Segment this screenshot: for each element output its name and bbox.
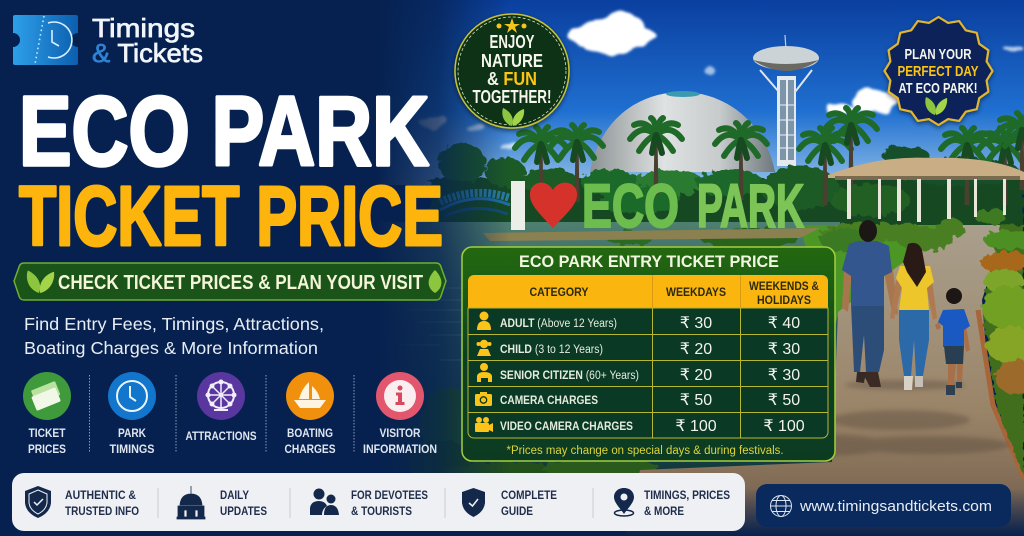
trust item: complete guide: GUIDE: [501, 506, 533, 518]
badge text: [898, 46, 978, 97]
row: child: CHILD (3 to 12 Years): [500, 344, 603, 356]
row: camera charges: CAMERA CHARGES: [500, 395, 598, 407]
trust item: timings prices and more: TIMINGS, PRICES: [644, 490, 730, 502]
badge text: [472, 32, 552, 107]
icon: banner right leaf: [429, 270, 441, 293]
icon item: park timings: [108, 372, 156, 456]
family walking: [842, 220, 970, 395]
badge text: TOGETHER!: [472, 87, 552, 107]
badge leaf: [925, 97, 947, 115]
logo word & Tickets: & Tickets: [92, 38, 203, 68]
row: senior citizen: ₹ 20: [680, 367, 712, 384]
bottom navy fade: [0, 488, 1024, 536]
trust item: daily updates: UPDATES: [220, 506, 267, 518]
row: video camera charges: ₹ 100: [763, 418, 805, 435]
badge: enjoy nature and fun together: [455, 14, 569, 128]
badge text: ENJOY: [490, 32, 534, 52]
logo icon: ticket and clock: [13, 15, 78, 65]
badge text: PERFECT DAY: [898, 63, 978, 80]
table header row: HOLIDAYS: [757, 293, 811, 307]
icon item: visitor information: INFORMATION: [363, 444, 437, 456]
table header row: WEEKDAYS: [666, 285, 726, 299]
woman: [890, 243, 937, 390]
sign letter I: [511, 181, 525, 230]
icon item: boating charges: CHARGES: [284, 444, 336, 456]
badge text: NATURE: [481, 51, 543, 71]
trust item: devotees and tourists: FOR DEVOTEES: [351, 490, 428, 502]
sign heart: [530, 183, 577, 228]
child: [935, 288, 970, 395]
logo word Timings: Timings: [92, 13, 195, 43]
trust item: daily updates: [177, 486, 267, 519]
logo: [13, 13, 203, 68]
trust item: daily updates: DAILY: [220, 490, 249, 502]
badge text: PLAN YOUR: [904, 46, 972, 63]
row: adult: ₹ 40: [768, 315, 800, 332]
badge text: AT ECO PARK!: [898, 80, 978, 97]
shore bushes: [408, 387, 660, 486]
icon item: ticket prices: PRICES: [28, 444, 66, 456]
badge leaf: [502, 108, 524, 126]
sign word ECO: ECO: [582, 172, 679, 240]
table body grid: [468, 308, 828, 438]
lawn: [800, 225, 960, 345]
path brick edge: [978, 310, 1024, 478]
table header row: CATEGORY: [530, 285, 588, 299]
row: camera charges: ₹ 50: [768, 392, 800, 409]
trust item: timings prices and more: [614, 488, 730, 518]
row: adult: ₹ 30: [680, 315, 712, 332]
badge text: & FUN: [487, 69, 537, 89]
website address: www.timingsandtickets.com: [799, 498, 992, 515]
palm trees: [515, 108, 1024, 205]
dome building: [590, 91, 775, 172]
subtitle text: Boating Charges & More Information: [24, 338, 318, 358]
I love Eco Park sign: [483, 172, 820, 241]
observation tower: [753, 35, 819, 166]
title: Eco Park: ECO PARK: [19, 76, 429, 186]
icon row: [23, 372, 437, 456]
garden hedges: [606, 208, 1006, 252]
man: [842, 220, 898, 387]
row: adult: ADULT (Above 12 Years): [500, 318, 617, 330]
row: camera charges: [475, 392, 800, 409]
right hedges: [980, 225, 1024, 478]
row: video camera charges: [475, 417, 805, 435]
row: child: ₹ 20: [680, 341, 712, 358]
trust item: complete guide: [462, 488, 557, 518]
lake water: [340, 222, 840, 472]
row: video camera charges: VIDEO CAMERA CHARGES: [500, 421, 633, 433]
subtitle text: [24, 314, 324, 358]
badge: plan your perfect day: [884, 17, 992, 125]
trust item: authentic info: [25, 486, 139, 518]
icon item: attractions: ATTRACTIONS: [186, 431, 257, 443]
table header row: [468, 275, 828, 308]
trust item: authentic info: AUTHENTIC &: [65, 490, 136, 502]
icon item: park timings: TIMINGS: [110, 444, 155, 456]
title: Ticket Price: TICKET PRICE: [19, 169, 443, 263]
icon: banner left leaves: [27, 270, 54, 293]
table header row: WEEKENDS &: [749, 279, 819, 293]
row: child: ₹ 30: [768, 341, 800, 358]
row: adult: [477, 312, 800, 332]
trust item: timings prices and more: & MORE: [644, 506, 684, 518]
trust item: complete guide: COMPLETE: [501, 490, 557, 502]
icon item: ticket prices: TICKET: [28, 428, 66, 440]
path shadows: [750, 380, 1010, 456]
icon item: boating charges: BOATING: [287, 428, 333, 440]
left navy overlay: [0, 0, 510, 536]
walking path: [625, 225, 1024, 536]
badge stars: [496, 18, 526, 33]
row: camera charges: ₹ 50: [680, 392, 712, 409]
blue bridge: [440, 193, 510, 216]
panel: trust bar: [12, 473, 745, 531]
clouds: [419, 13, 1024, 148]
website pill: [756, 484, 1011, 527]
banner text: CHECK TICKET PRICES & PLAN YOUR VISIT: [58, 272, 423, 294]
row: senior citizen: ₹ 30: [768, 367, 800, 384]
table heading: ECO PARK ENTRY TICKET PRICE: [519, 252, 779, 271]
row: senior citizen: SENIOR CITIZEN (60+ Years): [500, 370, 639, 382]
panel: ticket price table: [462, 247, 835, 461]
icon: globe: [770, 496, 792, 516]
tree line: [430, 143, 1024, 238]
icon item: visitor information: VISITOR: [380, 428, 421, 440]
sky: [0, 0, 1024, 185]
sign word PARK: PARK: [697, 172, 804, 240]
icon item: park timings: PARK: [118, 428, 147, 440]
table footnote: *Prices may change on special days & during festivals.: [506, 445, 784, 457]
icon item: ticket prices: [23, 372, 71, 456]
subtitle text: Find Entry Fees, Timings, Attractions,: [24, 314, 324, 334]
trust item: devotees and tourists: [310, 488, 428, 518]
row: senior citizen: [477, 363, 800, 384]
banner: check ticket prices: [14, 263, 446, 300]
pavilion: [828, 158, 1024, 222]
water ripples: [400, 288, 462, 360]
icon item: visitor information: [363, 372, 437, 456]
row: child: [476, 340, 800, 358]
icon item: attractions: [186, 372, 257, 443]
trust item: authentic info: TRUSTED INFO: [65, 506, 139, 518]
row: video camera charges: ₹ 100: [675, 418, 717, 435]
trust item: devotees and tourists: & TOURISTS: [351, 506, 412, 518]
sign platform: [483, 228, 820, 241]
icon item: boating charges: [284, 372, 336, 456]
